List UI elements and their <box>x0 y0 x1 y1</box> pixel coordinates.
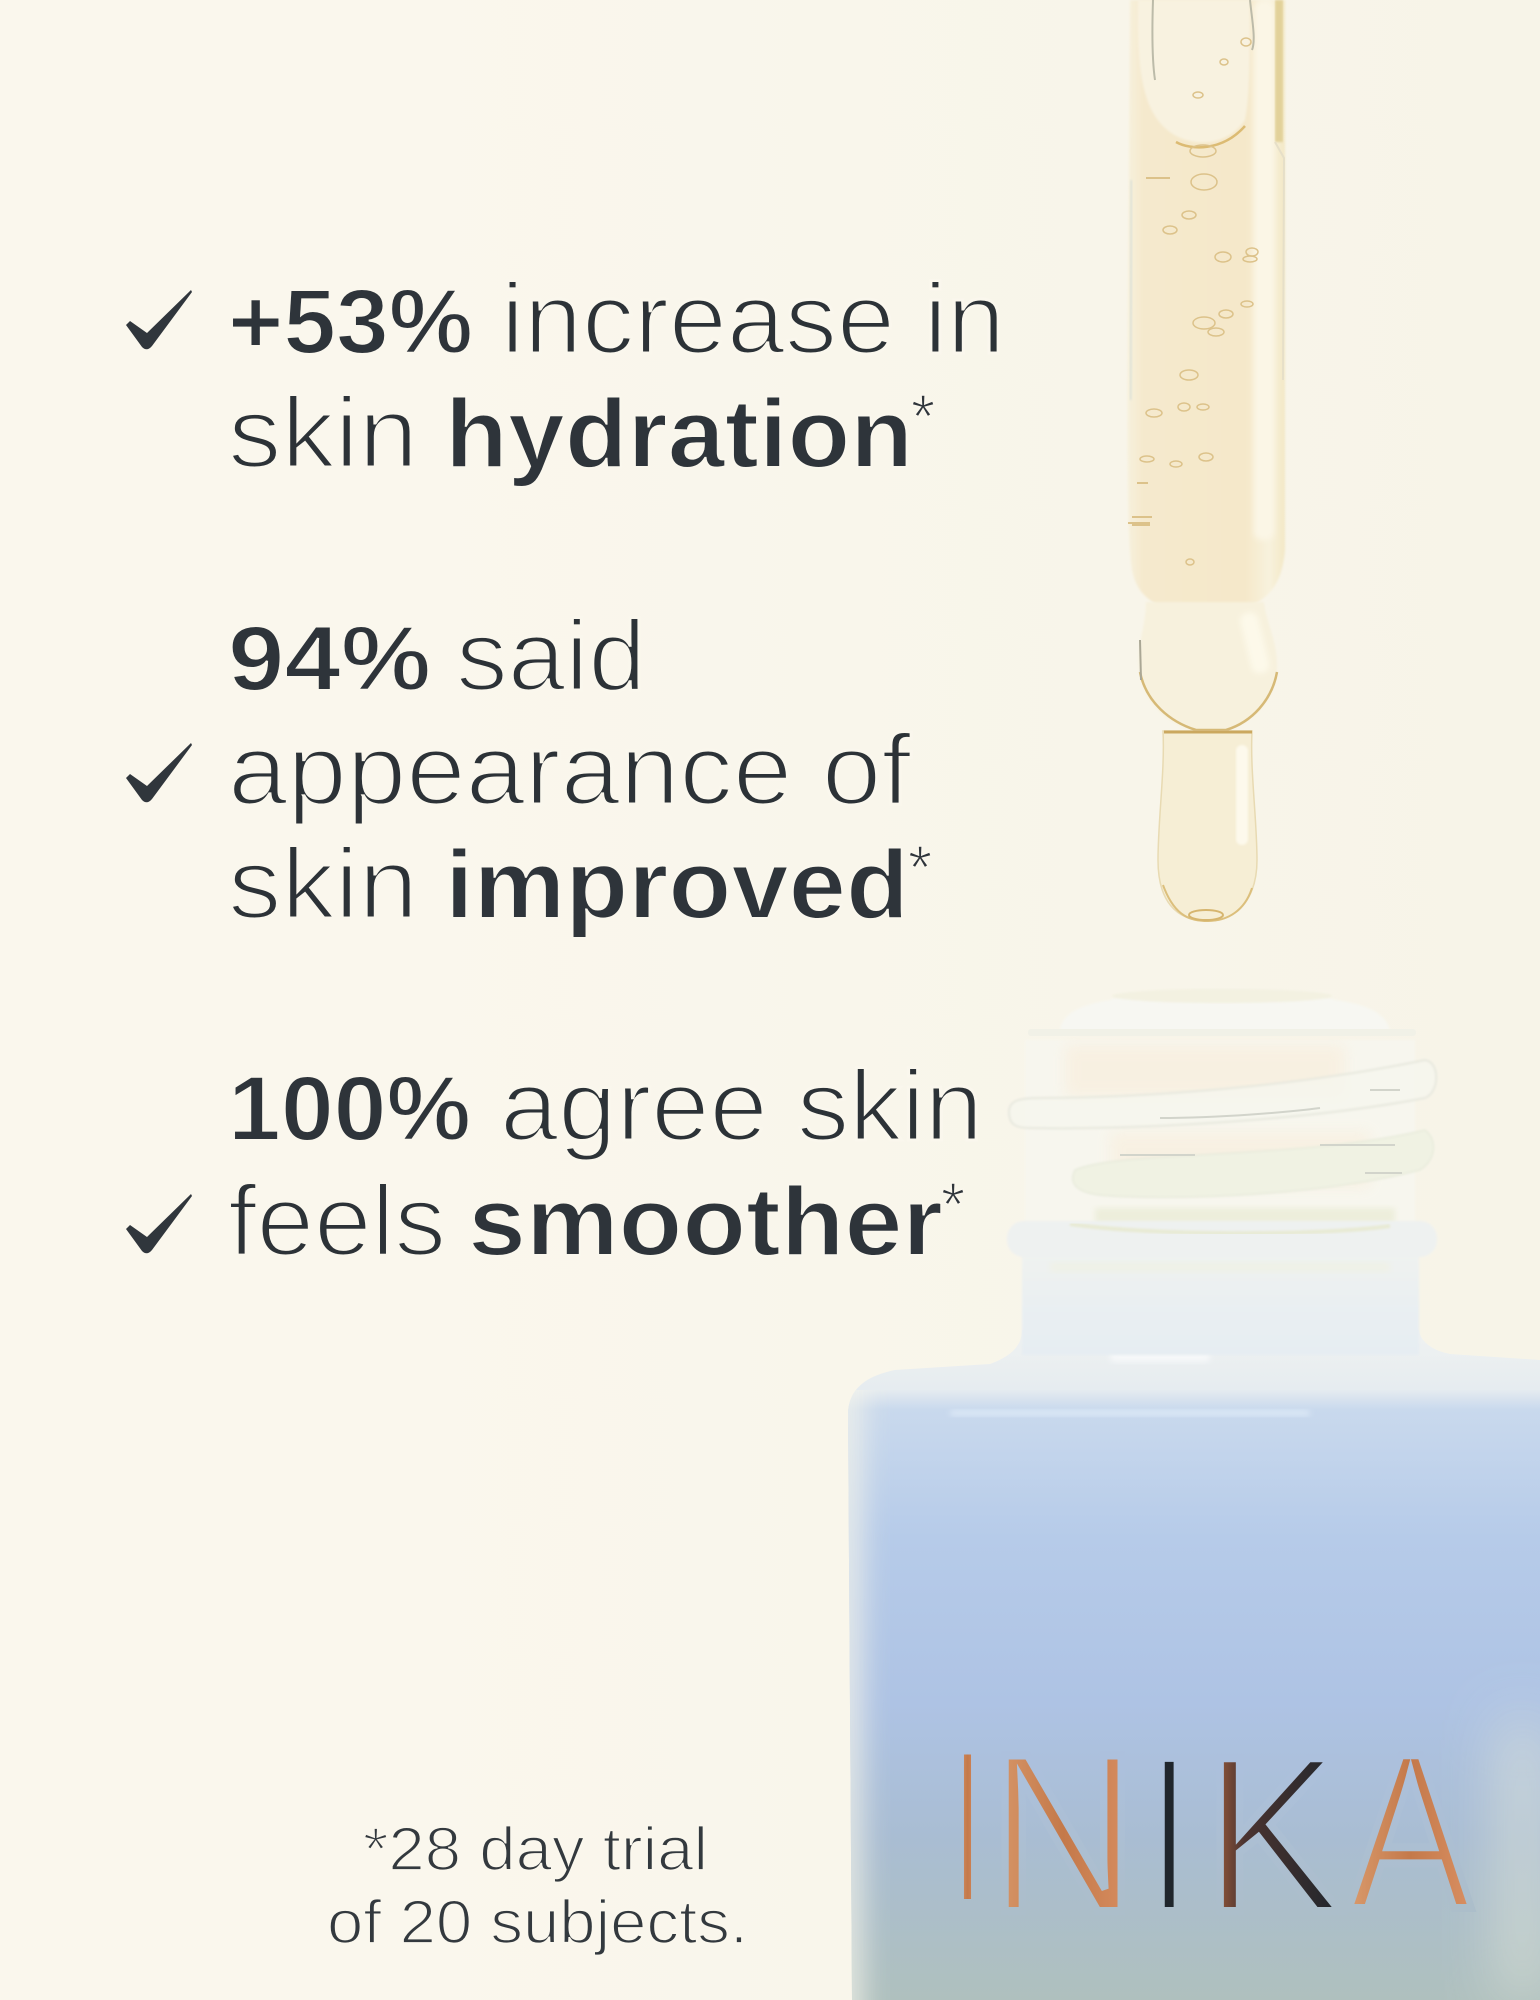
footnote <box>327 1815 748 1956</box>
claim text: skin <box>228 828 418 940</box>
bottle body <box>825 1330 1540 2000</box>
INIKA logo: A <box>1349 1708 1472 1956</box>
air bubbles <box>1128 38 1258 871</box>
claim text: feels <box>228 1165 446 1277</box>
claim text: * <box>908 834 932 903</box>
claim text: increase in <box>501 263 1005 375</box>
claim text: skin <box>228 377 418 489</box>
footnote: of 20 subjects. <box>327 1888 748 1956</box>
claim text: 100% <box>228 1058 471 1160</box>
claim text <box>228 600 932 940</box>
icon: check mark <box>126 290 192 349</box>
dropper tube <box>1127 0 1285 606</box>
claim text: * <box>911 383 935 452</box>
claim text: improved <box>445 830 909 939</box>
icon: check mark <box>126 1194 192 1253</box>
claim text: 94% <box>228 608 431 710</box>
INIKA logo: I <box>957 1710 978 1944</box>
claim text: smoother <box>468 1167 943 1276</box>
dropper tip <box>1158 731 1257 921</box>
INIKA logo: N <box>988 1707 1138 1960</box>
claim text <box>228 263 1005 489</box>
claim: appearance <box>126 600 932 940</box>
claim text: said <box>456 600 646 712</box>
claim text <box>228 1050 983 1277</box>
claim text: * <box>941 1171 965 1240</box>
bottle <box>825 989 1540 2000</box>
icon: check mark <box>126 743 192 802</box>
INIKA logo: I <box>1156 1716 1182 1952</box>
glass threads <box>1009 1060 1436 1197</box>
claim text: agree skin <box>500 1050 983 1162</box>
INIKA logo: K <box>1203 1710 1342 1958</box>
INIKA logo <box>957 1707 1472 1960</box>
claim text: hydration <box>445 379 913 488</box>
frosted collar <box>1007 1221 1437 1257</box>
claim: hydration <box>126 263 1005 489</box>
dropper bulb <box>1139 602 1277 730</box>
footnote: *28 day trial <box>363 1815 708 1883</box>
claim: smoother <box>126 1050 983 1277</box>
bottle neck <box>1022 1040 1419 1355</box>
claim text: appearance of <box>228 714 911 826</box>
claim text: +53% <box>228 271 473 373</box>
bottle rim <box>1028 989 1416 1036</box>
dropper with serum <box>1127 0 1285 921</box>
